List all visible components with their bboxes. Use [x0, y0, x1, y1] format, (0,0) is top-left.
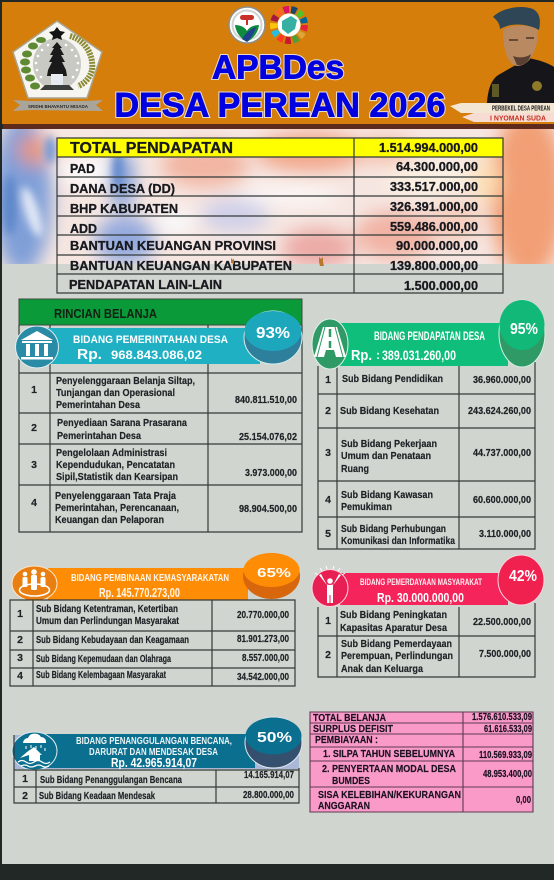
badge: 50 percent: 50%: [257, 729, 292, 746]
income rows: PAD: [70, 161, 95, 176]
rows: Pendapatan: 3: [325, 447, 331, 459]
rows: Bencana: 1: [22, 773, 28, 785]
summary rows: 0,00: [516, 794, 531, 806]
ribbon: Pembinaan: BIDANG PEMBINAAN KEMASYARAKATAN: [71, 573, 229, 584]
panel: income table: [57, 138, 503, 293]
heading: total income: 1.514.994.000,00: [379, 140, 478, 155]
rows: Pendapatan: Umum dan Penataan: [341, 450, 431, 462]
ribbon: Pendapatan: BIDANG PENDAPATAN DESA: [374, 329, 485, 343]
income rows: 326.391.000,00: [390, 199, 478, 214]
grey body panel: [2, 260, 554, 864]
rows: Pendapatan: Sub Bidang Kawasan: [341, 489, 433, 501]
rows: Pemerintahan: Pemerintahan Desa: [56, 399, 140, 411]
rows: Pemerintahan: Keuangan dan Pelaporan: [55, 514, 164, 526]
rows: Pembinaan: 1: [17, 608, 23, 620]
rows: Pemerintahan: 840.811.510,00: [235, 394, 297, 406]
summary rows: 48.953.400,00: [483, 768, 532, 780]
rows: Pemerdayaan: 2: [325, 649, 331, 661]
logo: ministry emblem: [229, 7, 265, 43]
rows: Pembinaan: 81.901.273,00: [237, 633, 289, 645]
rows: Pendapatan: 36.960.000,00: [473, 374, 531, 386]
badge: 65 percent: 65%: [257, 565, 292, 580]
rows: Pembinaan: 4: [17, 670, 23, 682]
rows: Pemerdayaan: 22.500.000,00: [473, 616, 531, 628]
rows: Pendapatan: Pemukiman: [341, 501, 392, 513]
summary rows: SISA KELEBIHAN/KEKURANGAN: [318, 789, 461, 801]
ribbon: Pemerintahan: BIDANG PEMERINTAHAN DESA: [73, 334, 228, 346]
rows: Pembinaan: Sub Bidang Ketentraman, Ketertiban: [36, 603, 178, 615]
rows: Pemerintahan: Sipil,Statistik dan Kearsipan: [56, 471, 178, 483]
rows: Pemerintahan: 1: [31, 384, 37, 396]
rows: Pemerintahan: Kependudukan, Pencatatan: [56, 459, 175, 471]
logo: SDG wheel: [274, 10, 304, 40]
icon: road: [312, 319, 348, 369]
title: APBDes: APBDes: [212, 50, 344, 86]
rows: Pendapatan: Sub Bidang Pendidikan: [342, 373, 443, 385]
rows: Pemerdayaan: [325, 609, 531, 675]
income rows: BANTUAN KEUANGAN PROVINSI: [70, 238, 276, 253]
rows: Pemerdayaan: Sub Bidang Peningkatan: [340, 609, 447, 621]
rows: Pemerintahan: Tunjangan dan Operasional: [56, 387, 175, 399]
rows: Pembinaan: 34.542.000,00: [237, 671, 289, 683]
rows: Pemerintahan: Penyelenggaraan Tata Praja: [55, 490, 176, 502]
ribbon: Pemerdayaan: Rp. 30.000.000,00: [377, 590, 464, 605]
rows: Bencana: Sub Bidang Keadaan Mendesak: [39, 790, 155, 802]
rows: Bencana: 28.800.000,00: [243, 789, 294, 801]
icon: empowered person: [312, 566, 348, 606]
rows: Pemerintahan: 98.904.500,00: [239, 503, 297, 515]
income rows: 90.000.000,00: [396, 238, 478, 253]
rows: Pemerintahan: 25.154.076,02: [239, 431, 297, 443]
rows: Pendapatan: 44.737.000,00: [473, 447, 531, 459]
income rows: ADD: [70, 221, 97, 236]
icon: government building: [16, 326, 58, 368]
rows: Pemerintahan: 4: [31, 497, 37, 509]
ribbon: village head title: [450, 103, 554, 113]
ribbon: Bencana: Rp. 42.965.914,07: [111, 755, 197, 770]
badge: 42 percent: 42%: [509, 568, 537, 585]
panel: Bidang Pemerdayaan Masyarakat: [312, 555, 544, 677]
rows: Pembinaan: [17, 603, 289, 683]
rows: Pemerintahan: 3: [31, 459, 37, 471]
rows: Pembinaan: Sub Bidang Kelembagaan Masyarakat: [36, 669, 166, 681]
summary rows: BUMDES: [332, 775, 370, 787]
ribbon: Pemerintahan: 968.843.086,02: [111, 348, 202, 362]
rows: Pendapatan: 2: [325, 405, 331, 417]
rows: Pemerdayaan: Sub Bidang Pemerdayaan: [341, 638, 452, 650]
logo: Kabupaten crest: [13, 21, 103, 111]
income rows: 139.800.000,00: [390, 258, 478, 273]
rows: Pemerintahan: Penyediaan Sarana Prasarana: [57, 417, 187, 429]
rows: Pendapatan: Komunikasi dan Informatika: [341, 535, 455, 547]
ribbon: village head name: [462, 113, 554, 122]
summary rows: 61.616.533,09: [484, 723, 532, 735]
rows: Pendapatan: Ruang: [341, 463, 369, 475]
icon: community: [12, 566, 57, 601]
ribbon: Pemerdayaan: BIDANG PEMERDAYAAN MASYARAKAT: [360, 577, 482, 588]
ribbon: Pemerintahan: Rp.: [77, 346, 102, 363]
summary rows: 2. PENYERTAAN MODAL DESA: [322, 763, 456, 775]
summary rows: [313, 711, 532, 812]
rows: Bencana: 14.165.914,07: [244, 769, 294, 781]
rows: Pembinaan: 20.770.000,00: [237, 609, 289, 621]
income rows: 333.517.000,00: [390, 179, 478, 194]
rows: Pemerintahan: Pengelolaan Administrasi: [56, 447, 167, 459]
rows: Pendapatan: 243.624.260,00: [468, 405, 531, 417]
title: APBDes: APBDes: [212, 50, 344, 86]
summary rows: 110.569.933,09: [479, 749, 532, 761]
rows: Pendapatan: 3.110.000,00: [479, 528, 531, 540]
sky background image: [2, 129, 554, 264]
rows: Pendapatan: Sub Bidang Pekerjaan: [341, 438, 437, 450]
badge: 93 percent: 93%: [256, 325, 290, 342]
ribbon: village head name: I NYOMAN SUDA: [490, 116, 546, 122]
panel: Bidang Pemerintahan Desa: [16, 299, 302, 532]
income rows: [69, 159, 478, 293]
rows: Pemerdayaan: Perempuan, Perlindungan: [341, 650, 453, 662]
summary rows: SURPLUS DEFISIT: [313, 723, 394, 735]
heading: total income: TOTAL PENDAPATAN: [70, 140, 233, 157]
rows: Pemerdayaan: 7.500.000,00: [479, 648, 531, 660]
income rows: DANA DESA (DD): [70, 181, 175, 196]
rows: Pembinaan: Sub Bidang Kepemudaan dan Olahraga: [36, 653, 171, 665]
badge: 95 percent: [499, 300, 545, 367]
rows: Pendapatan: Sub Bidang Perhubungan: [341, 523, 446, 535]
header banner: [2, 2, 554, 129]
rows: Bencana: [22, 769, 294, 802]
rows: Pemerintahan: Pemerintahan, Perencanaan,: [55, 502, 179, 514]
rows: Pemerdayaan: Kapasitas Aparatur Desa: [340, 622, 447, 634]
income rows: PENDAPATAN LAIN-LAIN: [69, 277, 222, 292]
rows: Pembinaan: Umum dan Perlindungan Masyarakat: [36, 615, 179, 627]
ribbon: Pembinaan: Rp. 145.770.273,00: [99, 586, 180, 600]
icon: flood: [12, 732, 57, 770]
income rows: 64.300.000,00: [396, 159, 478, 174]
badge: 42 percent: [498, 555, 544, 605]
ribbon: Pembinaan: [48, 568, 248, 600]
summary rows: TOTAL BELANJA: [313, 712, 386, 724]
summary rows: 1.576.610.533,09: [472, 711, 532, 723]
rows: Pembinaan: Sub Bidang Kebudayaan dan Keagamaan: [36, 634, 189, 646]
income rows: BANTUAN KEUANGAN KABUPATEN: [70, 258, 292, 273]
badge: 93 percent: [244, 311, 302, 364]
ribbon: Pemerintahan: [45, 328, 260, 364]
panel: Bidang Pendapatan Desa: [312, 300, 545, 549]
badge: 95 percent: 95%: [510, 321, 538, 338]
ribbon: Bencana: DARURAT DAN MENDESAK DESA: [89, 746, 218, 758]
rows: Pemerintahan: Penyelenggaraan Belanja Siltap,: [56, 375, 195, 387]
heading: total income: [70, 140, 478, 157]
title: Desa Perean 2026: DESA PEREAN 2026: [114, 86, 446, 124]
rows: Pembinaan: 2: [17, 634, 23, 646]
rows: Pembinaan: 8.557.000,00: [242, 652, 289, 664]
income rows: 1.500.000,00: [404, 278, 478, 293]
rows: Pemerintahan: Pemerintahan Desa: [57, 430, 141, 442]
income rows: BHP KABUPATEN: [70, 201, 178, 216]
badge: 65 percent: [243, 553, 300, 599]
ribbon: Pendapatan: :: [376, 348, 380, 362]
rows: Pendapatan: 1: [325, 374, 331, 386]
panel: Bidang Pembinaan Kemasyarakatan: [10, 553, 300, 686]
ribbon: Pendapatan: Rp.: [351, 347, 372, 364]
ribbon: Pendapatan: 389.031.260,00: [382, 347, 456, 363]
rows: Pendapatan: 60.600.000,00: [473, 494, 531, 506]
rows: Bencana: 2: [22, 790, 28, 802]
rows: Bencana: Sub Bidang Penanggulangan Bencana: [40, 774, 182, 786]
rows: Pembinaan: 3: [17, 652, 23, 664]
logo motto ribbon: SRIDHI BHAVANTU MISADA: [28, 104, 89, 109]
rows: Pendapatan: Sub Bidang Kesehatan: [340, 405, 439, 417]
panel: budget summary table: [310, 711, 533, 812]
rows: Pemerintahan: 3.973.000,00: [245, 467, 297, 479]
heading: Rincian Belanja: [19, 299, 302, 325]
ribbon: Bencana: BIDANG PENANGGULANGAN BENCANA,: [76, 735, 232, 747]
rows: Pemerintahan: 2: [31, 422, 37, 434]
rows: Pendapatan: [325, 373, 531, 547]
rows: Pemerdayaan: 1: [325, 615, 331, 627]
panel: Bidang Penanggulangan Bencana: [12, 717, 302, 803]
summary rows: ANGGARAN: [318, 800, 370, 812]
rows: Pendapatan: 5: [325, 528, 331, 540]
ribbon: Pendapatan: [338, 323, 508, 366]
income rows: 559.486.000,00: [390, 219, 478, 234]
title: Desa Perean 2026: DESA PEREAN 2026: [114, 86, 446, 124]
ribbon: Pemerdayaan: [340, 573, 508, 605]
summary rows: PEMBIAYAAN :: [315, 734, 378, 746]
portrait: village head: [487, 7, 554, 103]
summary rows: 1. SILPA TAHUN SEBELUMNYA: [323, 748, 455, 760]
ribbon: Bencana: [40, 734, 255, 770]
heading: Rincian Belanja: RINCIAN BELANJA: [54, 307, 157, 321]
rows: Pemerdayaan: Anak dan Keluarga: [341, 663, 423, 675]
rows: Pendapatan: 4: [325, 494, 331, 506]
rows: Pemerintahan: [31, 375, 297, 526]
badge: 50 percent: [245, 717, 302, 768]
